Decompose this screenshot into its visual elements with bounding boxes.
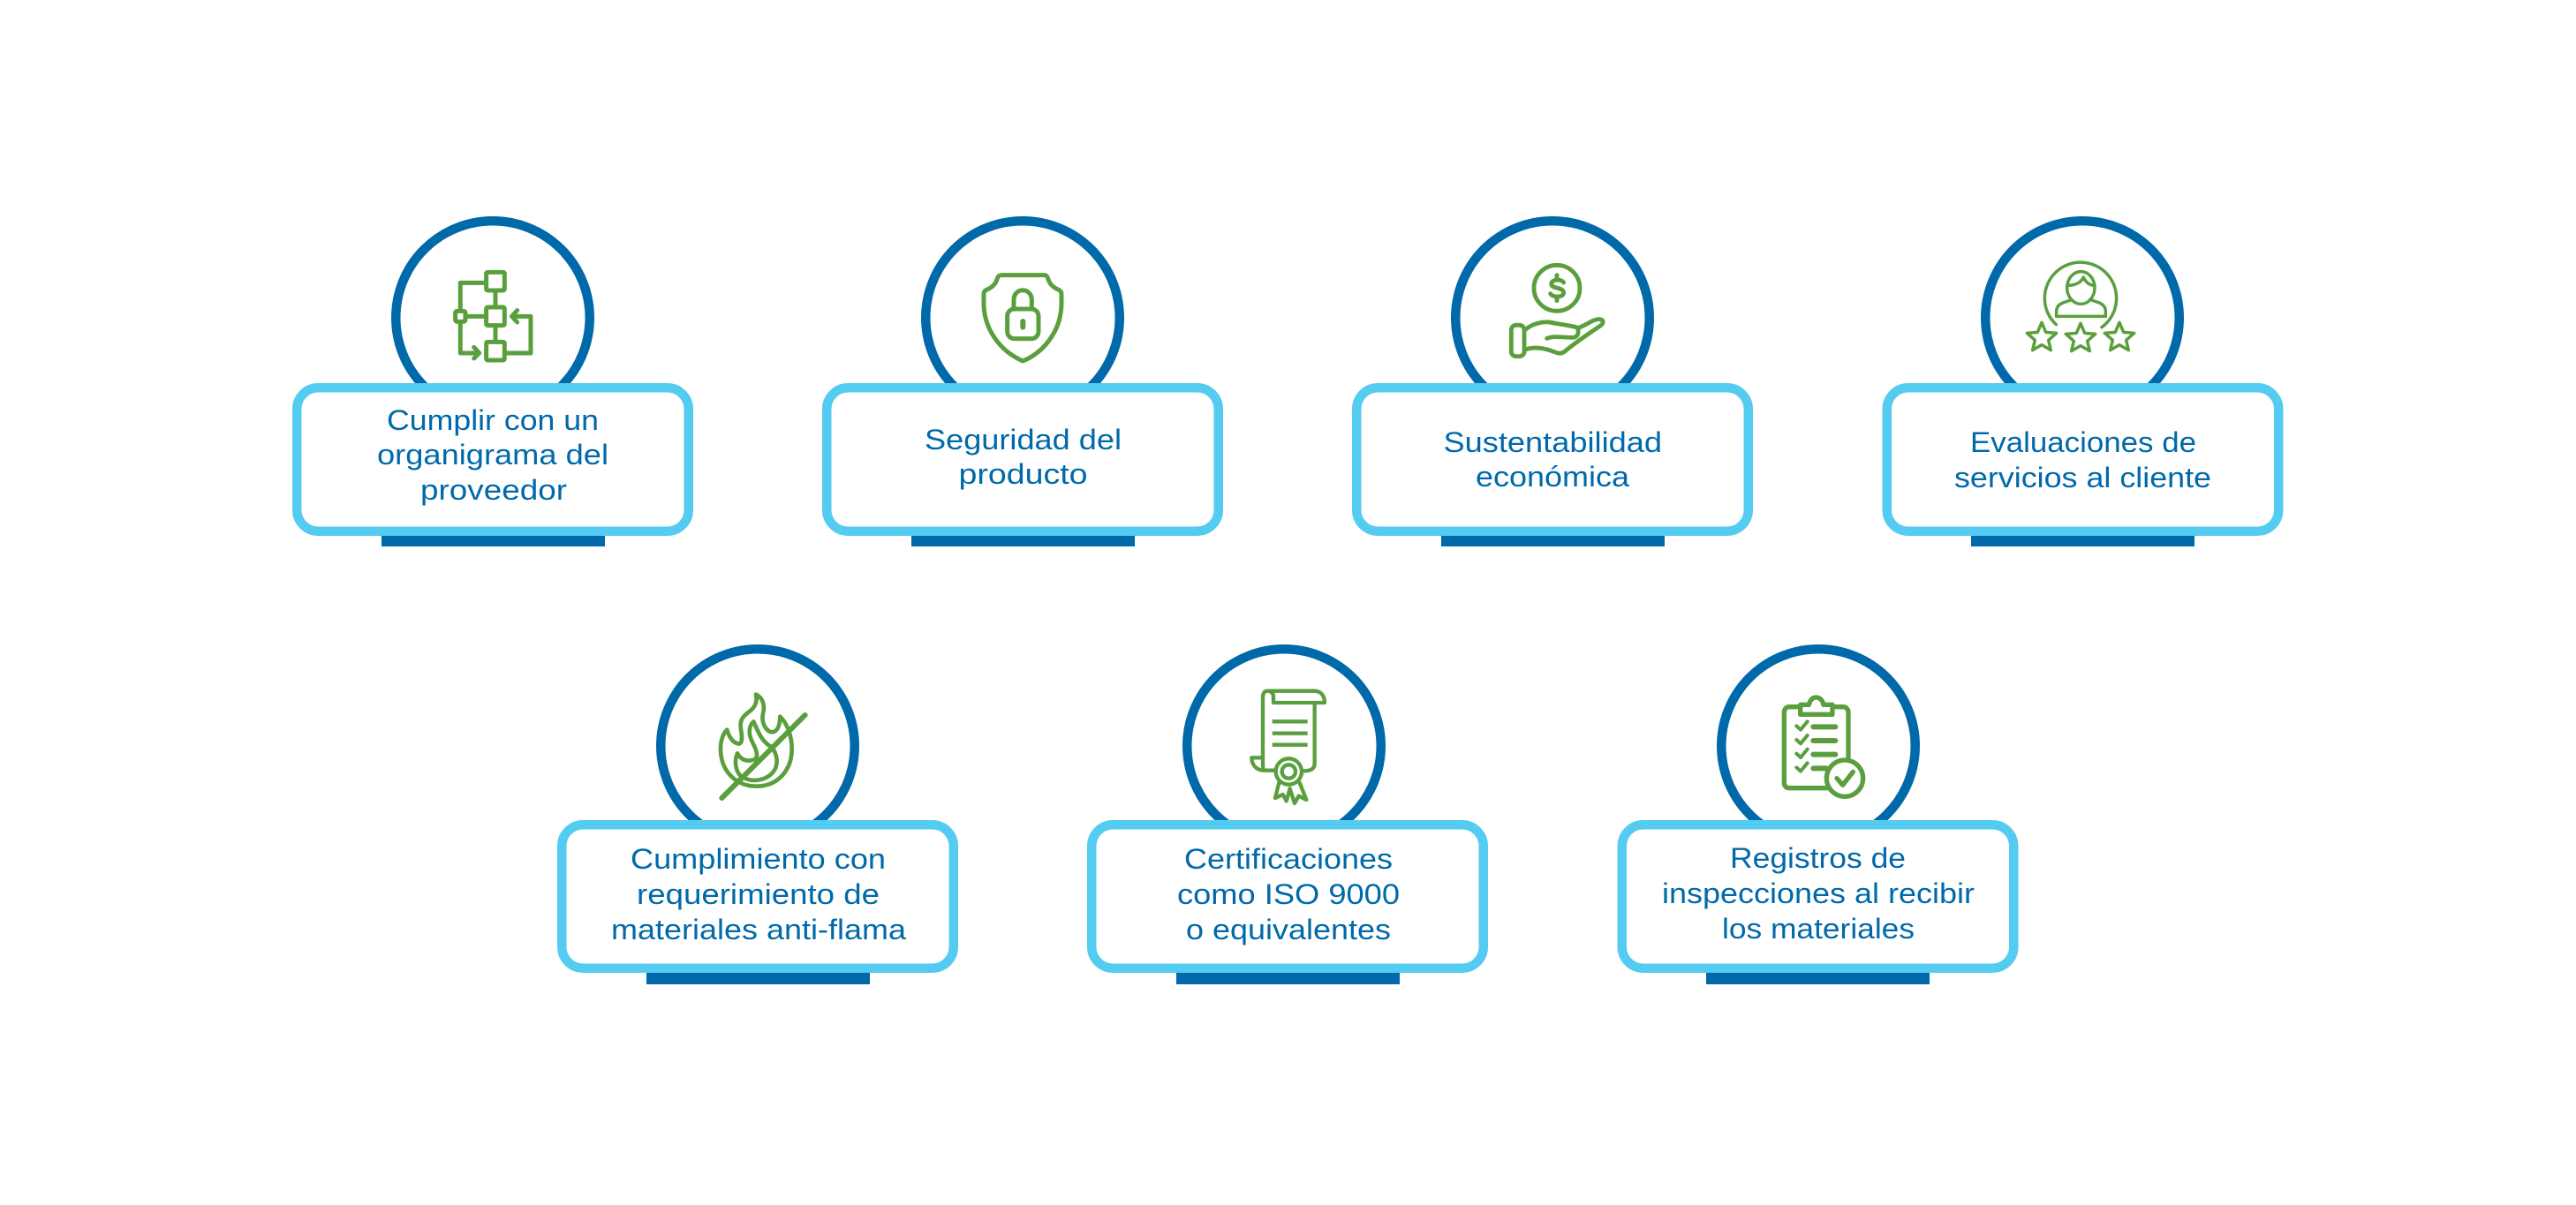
circle — [661, 649, 855, 843]
label text: proveedor — [420, 474, 567, 506]
label text: como ISO 9000 — [1177, 878, 1400, 910]
card: evaluaciones de servicios al cliente — [1887, 221, 2278, 546]
label text: los materiales — [1722, 913, 1915, 945]
label text — [1443, 426, 1662, 493]
accent bar — [381, 530, 605, 546]
label box — [1092, 825, 1484, 968]
label text: materiales anti-flama — [611, 914, 906, 945]
circle — [925, 221, 1120, 415]
icon: shield with padlock — [984, 275, 1061, 361]
circle — [396, 221, 590, 415]
icon: hand holding coin — [1511, 265, 1603, 357]
card: requerimiento anti-flama — [562, 649, 954, 984]
label text — [1662, 842, 1975, 945]
label text: requerimiento de — [637, 878, 880, 910]
icon: certificate scroll with seal — [1251, 691, 1325, 803]
icon: crossed-out flame — [721, 695, 805, 798]
label text: Sustentabilidad — [1443, 426, 1662, 458]
card: sustentabilidad economica — [1356, 221, 1749, 546]
label text: inspecciones al recibir — [1662, 877, 1975, 909]
label text: organigrama del — [377, 439, 608, 471]
label box — [297, 388, 689, 531]
accent bar — [1176, 967, 1400, 984]
accent bar — [1706, 967, 1930, 984]
label text: producto — [959, 458, 1088, 490]
label text: Certificaciones — [1184, 843, 1393, 875]
label text — [1177, 843, 1400, 945]
label text: Registros de — [1730, 842, 1906, 874]
circle — [1187, 649, 1381, 843]
label box — [827, 388, 1219, 531]
label text: Cumplimiento con — [631, 843, 886, 875]
label text: o equivalentes — [1186, 914, 1391, 945]
card: registros de inspecciones — [1622, 649, 2013, 984]
accent bar — [1971, 530, 2195, 546]
label text — [377, 404, 608, 506]
accent bar — [911, 530, 1135, 546]
label text — [925, 424, 1122, 490]
icon: customer with three stars — [2027, 262, 2134, 351]
card: organigrama del proveedor — [297, 221, 689, 546]
label text: económica — [1476, 461, 1629, 493]
accent bar — [646, 967, 870, 984]
icon: flowchart — [456, 272, 531, 360]
card: certificaciones ISO 9000 — [1092, 649, 1484, 984]
label text — [1954, 426, 2211, 493]
label text: Seguridad del — [925, 424, 1122, 456]
circle — [1985, 221, 2179, 415]
circle — [1455, 221, 1650, 415]
label box — [562, 825, 954, 968]
card: seguridad del producto — [827, 221, 1219, 546]
label box — [1887, 388, 2278, 531]
label text: Cumplir con un — [387, 404, 599, 436]
label text: servicios al cliente — [1954, 462, 2211, 493]
label text: Evaluaciones de — [1970, 426, 2196, 458]
accent bar — [1441, 530, 1665, 546]
label text — [611, 843, 906, 945]
icon: clipboard checklist — [1784, 697, 1863, 796]
circle — [1721, 649, 1915, 843]
label box — [1356, 388, 1749, 531]
label box — [1622, 825, 2013, 968]
